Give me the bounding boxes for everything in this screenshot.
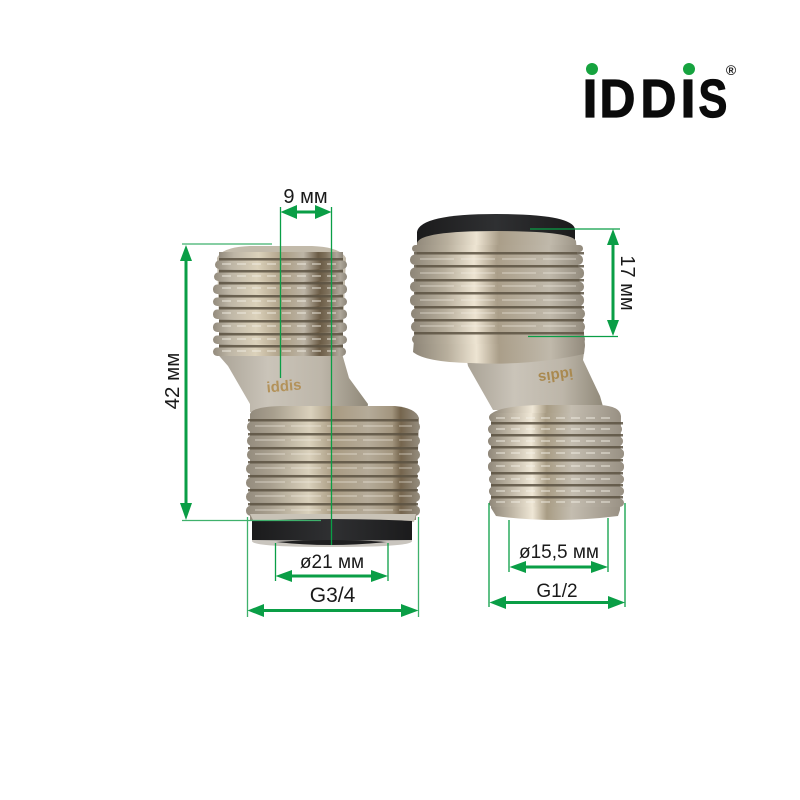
- logo green dots: [586, 63, 695, 75]
- ø21 мм extension lines: [276, 543, 388, 581]
- G1/2 label: G1/2: [536, 581, 578, 602]
- 42 мм label: 42 мм: [161, 353, 184, 409]
- 17 мм label: 17 мм: [616, 255, 638, 311]
- dimension: 42 мм: [161, 244, 321, 520]
- dimension: G1/2: [489, 503, 625, 609]
- G3/4 extension lines: [248, 517, 418, 617]
- ø15,5 мм extension lines: [509, 518, 608, 572]
- ø15,5 мм arrow: [510, 561, 608, 573]
- dimension: ø15,5 мм: [509, 518, 608, 573]
- 9 мм label: 9 мм: [283, 186, 328, 208]
- dimension: 17 мм: [528, 229, 638, 336]
- dimension: G3/4: [248, 517, 418, 617]
- logo wordmark: D: [640, 68, 676, 128]
- right rubber gasket: [417, 214, 575, 244]
- logo wordmark: I: [582, 69, 598, 129]
- 17 мм extension lines: [528, 229, 620, 336]
- dimension: 9 мм: [280, 186, 332, 545]
- registered mark: ®: [726, 62, 737, 78]
- 9 мм extension lines: [280, 207, 332, 545]
- 17 мм arrow: [607, 229, 619, 336]
- G3/4 arrow: [248, 604, 418, 617]
- logo wordmark: D: [600, 68, 635, 128]
- fitting: left G3/4: [213, 246, 420, 547]
- G1/2 extension lines: [489, 503, 625, 607]
- left neck logo: iddis: [266, 377, 302, 396]
- logo wordmark: I: [680, 69, 696, 129]
- 9 мм arrow: [280, 205, 332, 219]
- right upper thread: [410, 231, 585, 364]
- 42 мм arrow: [180, 245, 192, 520]
- logo wordmark: S: [698, 70, 727, 129]
- logo wordmark: [582, 68, 727, 129]
- dimension: ø21 мм: [276, 543, 388, 582]
- right lower thread: [488, 405, 624, 520]
- right neck logo: iddis: [537, 365, 574, 386]
- 42 мм extension lines: [182, 244, 321, 520]
- left lower thread: [246, 406, 420, 524]
- ø15,5 мм label: ø15,5 мм: [519, 542, 599, 563]
- left upper thread: [213, 246, 347, 356]
- logo: IDDIS: [582, 62, 737, 129]
- ø21 мм label: ø21 мм: [300, 552, 364, 573]
- fitting: right G1/2: [410, 214, 624, 520]
- left rubber gasket: [252, 519, 412, 547]
- G1/2 arrow: [490, 596, 625, 609]
- G3/4 label: G3/4: [310, 584, 356, 607]
- left neck: [214, 350, 368, 412]
- right neck: [466, 345, 604, 410]
- ø21 мм arrow: [276, 570, 388, 582]
